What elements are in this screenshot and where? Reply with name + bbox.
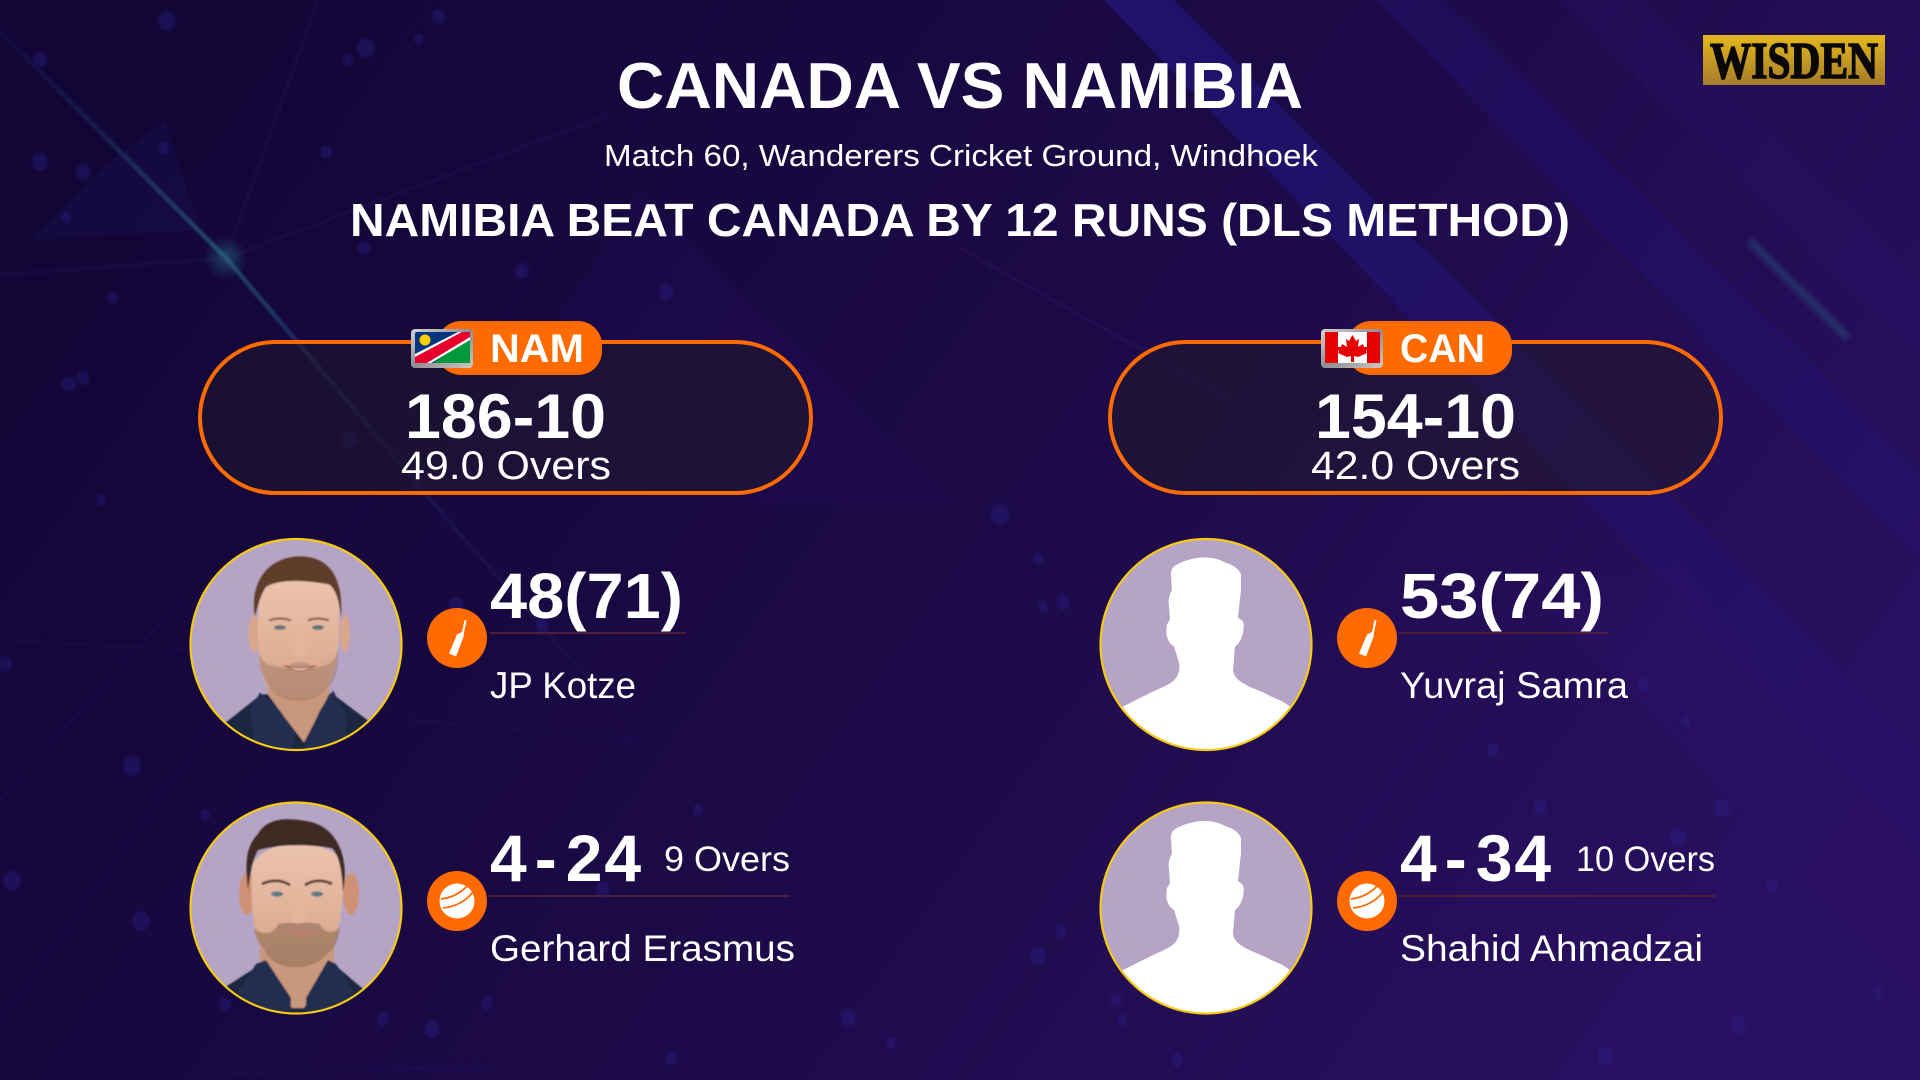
logo: Wisden: WISDEN bbox=[1710, 33, 1878, 90]
team badge: CAN bbox=[1347, 321, 1512, 375]
player name: JP Kotze bbox=[490, 665, 636, 706]
icon: ball bbox=[427, 871, 487, 931]
title: CANADA VS NAMIBIA bbox=[617, 49, 1303, 122]
overs: 49.0 Overs bbox=[401, 444, 611, 488]
player name: Shahid Ahmadzai bbox=[1400, 928, 1703, 969]
result headline: NAMIBIA BEAT CANADA BY 12 RUNS (DLS METHOD) bbox=[350, 194, 1570, 246]
icon: ball bbox=[1337, 871, 1397, 931]
player name: Gerhard Erasmus bbox=[490, 928, 795, 969]
panel: Namibia score bbox=[200, 321, 811, 493]
icon: bat bbox=[1337, 608, 1397, 668]
portrait: JP Kotze bbox=[184, 539, 408, 756]
player row: Gerhard Erasmus bbox=[184, 802, 795, 1020]
match details: Match 60, Wanderers Cricket Ground, Windhoek bbox=[604, 138, 1319, 173]
flag: Canada bbox=[1321, 329, 1383, 368]
overs: 42.0 Overs bbox=[1311, 444, 1520, 488]
player row: Yuvraj Samra bbox=[1094, 539, 1628, 756]
panel: Canada score bbox=[1110, 321, 1721, 493]
score: 154-10 bbox=[1315, 382, 1516, 452]
player name: Yuvraj Samra bbox=[1400, 665, 1628, 706]
stat: overs: 10 Overs bbox=[1576, 840, 1715, 879]
portrait: placeholder silhouette bbox=[1094, 802, 1318, 1020]
score: 186-10 bbox=[405, 382, 606, 452]
portrait: Gerhard Erasmus bbox=[184, 802, 408, 1020]
stat: wickets and runs: 4-24 bbox=[490, 821, 643, 895]
player row: JP Kotze bbox=[184, 539, 686, 756]
stat: runs: 53(74) bbox=[1400, 560, 1604, 632]
flag: Namibia bbox=[411, 329, 473, 368]
stat: overs: 9 Overs bbox=[664, 840, 790, 879]
stat: runs: 48(71) bbox=[490, 560, 683, 632]
player row: Shahid Ahmadzai bbox=[1094, 802, 1716, 1020]
team badge: CAN: CAN bbox=[1400, 327, 1485, 371]
stat: wickets and runs: 4-34 bbox=[1400, 821, 1553, 895]
team badge: NAM: NAM bbox=[490, 327, 584, 371]
portrait: placeholder silhouette bbox=[1094, 539, 1318, 756]
icon: bat bbox=[427, 608, 487, 668]
team badge: NAM bbox=[437, 321, 602, 375]
